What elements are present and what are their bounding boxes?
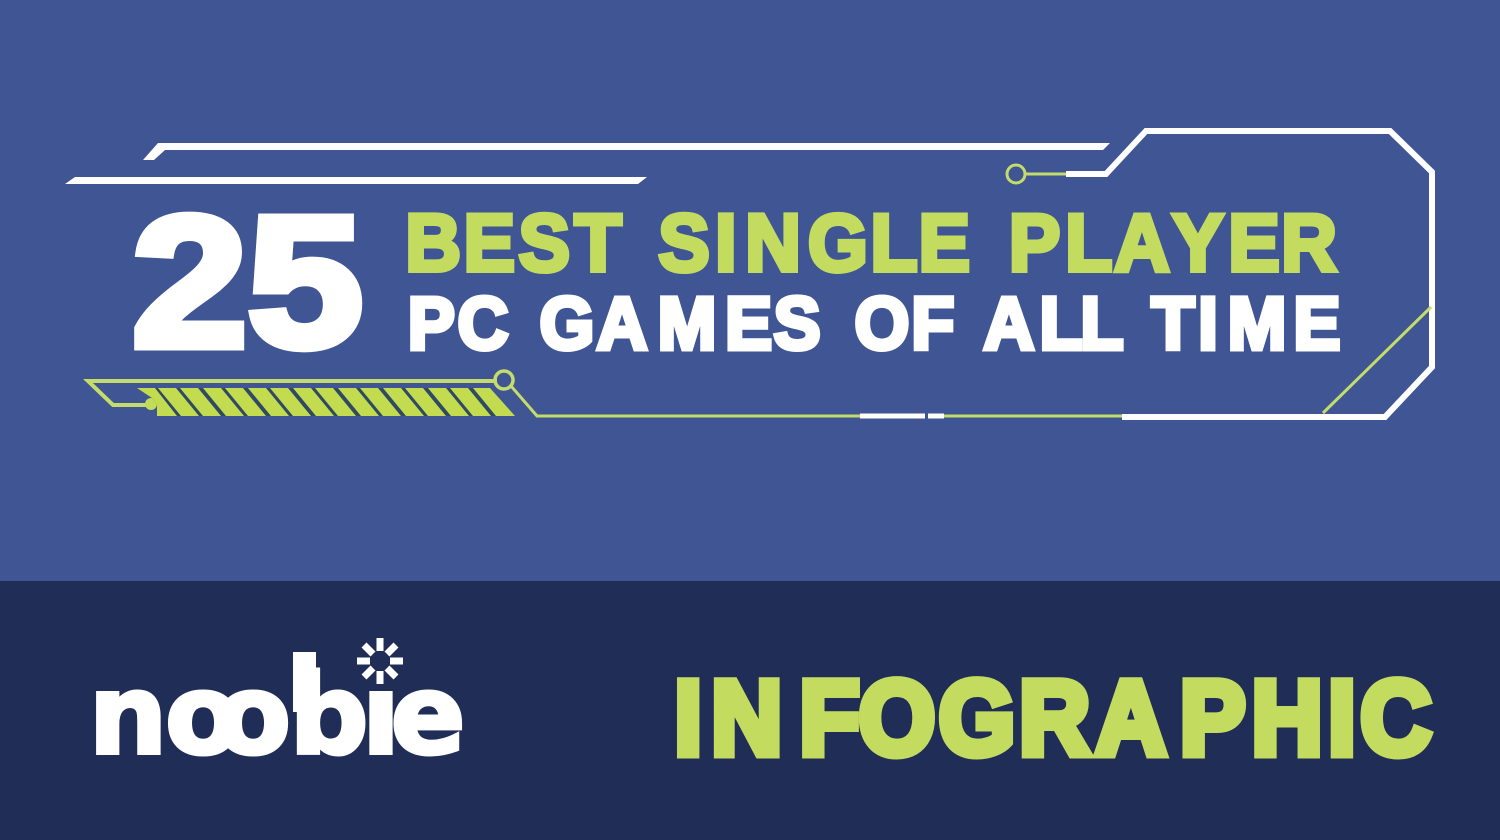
circuit: top right connector: [1007, 165, 1066, 183]
title line 1: BEST SINGLE PLAYER: [405, 197, 1337, 288]
panel: bottom band: [0, 581, 1500, 840]
top accent line: [143, 143, 1110, 160]
logo: noobie: noobie: [89, 651, 465, 779]
circuit: diagonal line: [1323, 307, 1431, 413]
title number: 25: [132, 179, 363, 386]
frame: white tech border: [860, 131, 1432, 417]
label: infographic: INFOGRAPHIC: [675, 660, 1431, 777]
second accent line: [65, 177, 647, 184]
icon: logo sun: [350, 634, 410, 688]
title line 2: PC GAMES OF ALL TIME: [408, 283, 1340, 365]
panel: top background: [0, 0, 1500, 581]
striped bar: [137, 388, 515, 416]
circuit: bottom left connector: [88, 371, 1122, 416]
